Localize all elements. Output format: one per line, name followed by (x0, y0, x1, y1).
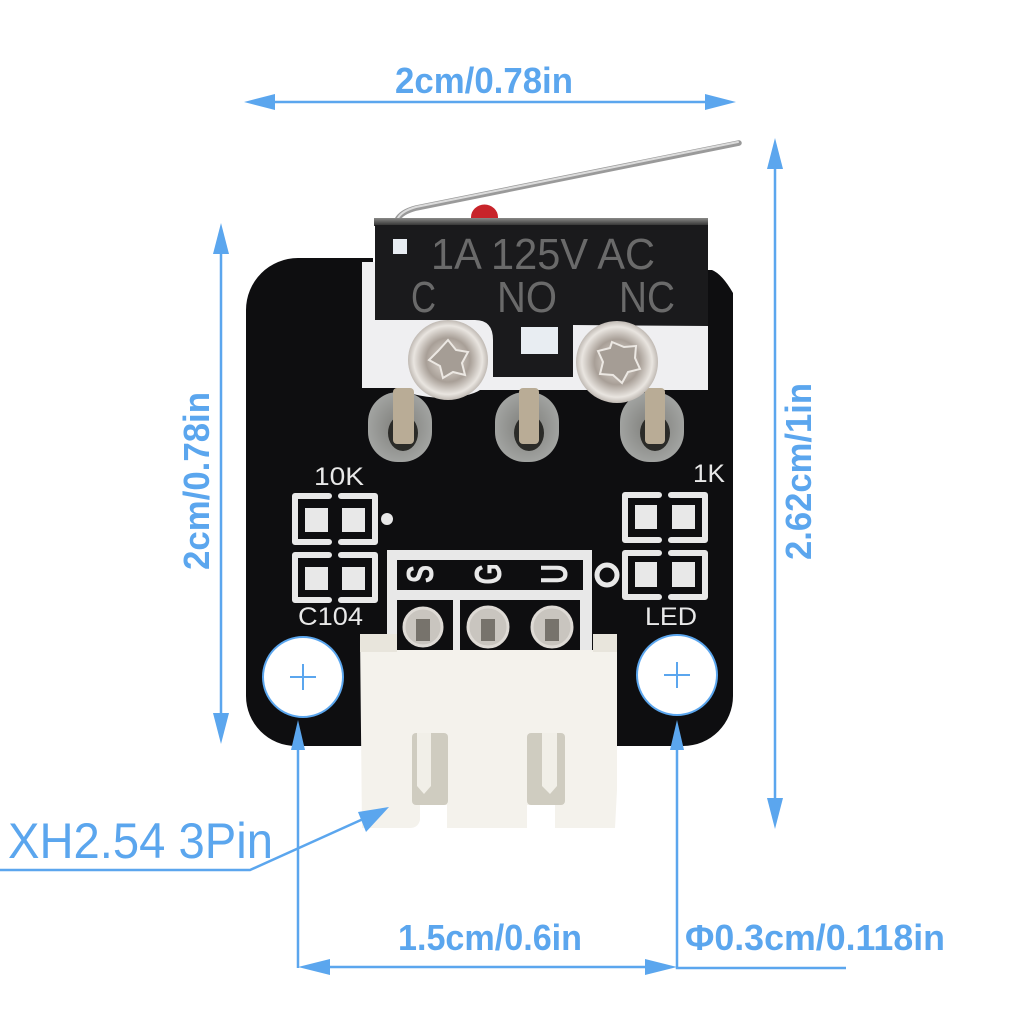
silkscreen right component footprints (625, 495, 705, 597)
connector top lip (360, 634, 617, 652)
terminal labels: NO (497, 273, 557, 322)
arrow: top width (244, 94, 736, 110)
silkscreen labels: LED (645, 603, 697, 631)
terminal labels (411, 273, 675, 322)
switch white lower body (362, 262, 708, 398)
connector pin left (417, 733, 431, 794)
screw left (408, 320, 488, 400)
pin labels: U (534, 564, 576, 584)
connector slot left (412, 733, 448, 805)
silkscreen dot (381, 513, 393, 525)
pin labels: S (400, 565, 442, 583)
arrow: hole spacing (298, 959, 677, 975)
white marks (393, 239, 558, 354)
microswitch (362, 142, 739, 398)
arrow: right height (767, 138, 783, 829)
PCB board (246, 258, 733, 746)
label: top width: 2cm/0.78in (395, 60, 573, 101)
connector slot right (527, 733, 565, 805)
silkscreen labels: 10K (314, 463, 364, 491)
arrow: connector leader (0, 807, 389, 870)
switch top strip (374, 218, 708, 226)
switch black body (375, 225, 708, 377)
label: hole spacing: 1.5cm/0.6in (398, 917, 582, 958)
label: hole diameter: Φ0.3cm/0.118in (685, 917, 945, 958)
label: connector type: XH2.54 3Pin (8, 813, 273, 869)
silkscreen labels: 1K (693, 460, 725, 488)
mounting hole left (263, 637, 343, 717)
arrow: left hole leader (291, 720, 305, 968)
silkscreen labels (298, 460, 725, 631)
pin labels: G (468, 563, 510, 585)
silkscreen labels: C104 (298, 603, 363, 631)
label: right height: 2.62cm/1in (778, 383, 819, 560)
arrow: left height (213, 223, 229, 744)
silkscreen ring (597, 565, 617, 585)
label: left height: 2cm/0.78in (176, 392, 217, 570)
screw right (576, 321, 658, 403)
connector pin right (542, 733, 557, 794)
white XH connector (360, 634, 617, 828)
solder pads and pins (368, 388, 684, 462)
mounting hole right (637, 635, 717, 715)
pin labels (400, 563, 576, 585)
red plunger (471, 205, 498, 226)
rating text: 1A 125V AC (431, 230, 655, 279)
arrow: right hole leader (670, 720, 846, 968)
terminal labels: NC (619, 273, 675, 322)
solder joints (404, 607, 572, 647)
lever arm (397, 142, 739, 220)
terminal labels: C (411, 273, 436, 322)
connector silkscreen frame (387, 550, 592, 650)
silkscreen left component footprints (295, 496, 375, 600)
